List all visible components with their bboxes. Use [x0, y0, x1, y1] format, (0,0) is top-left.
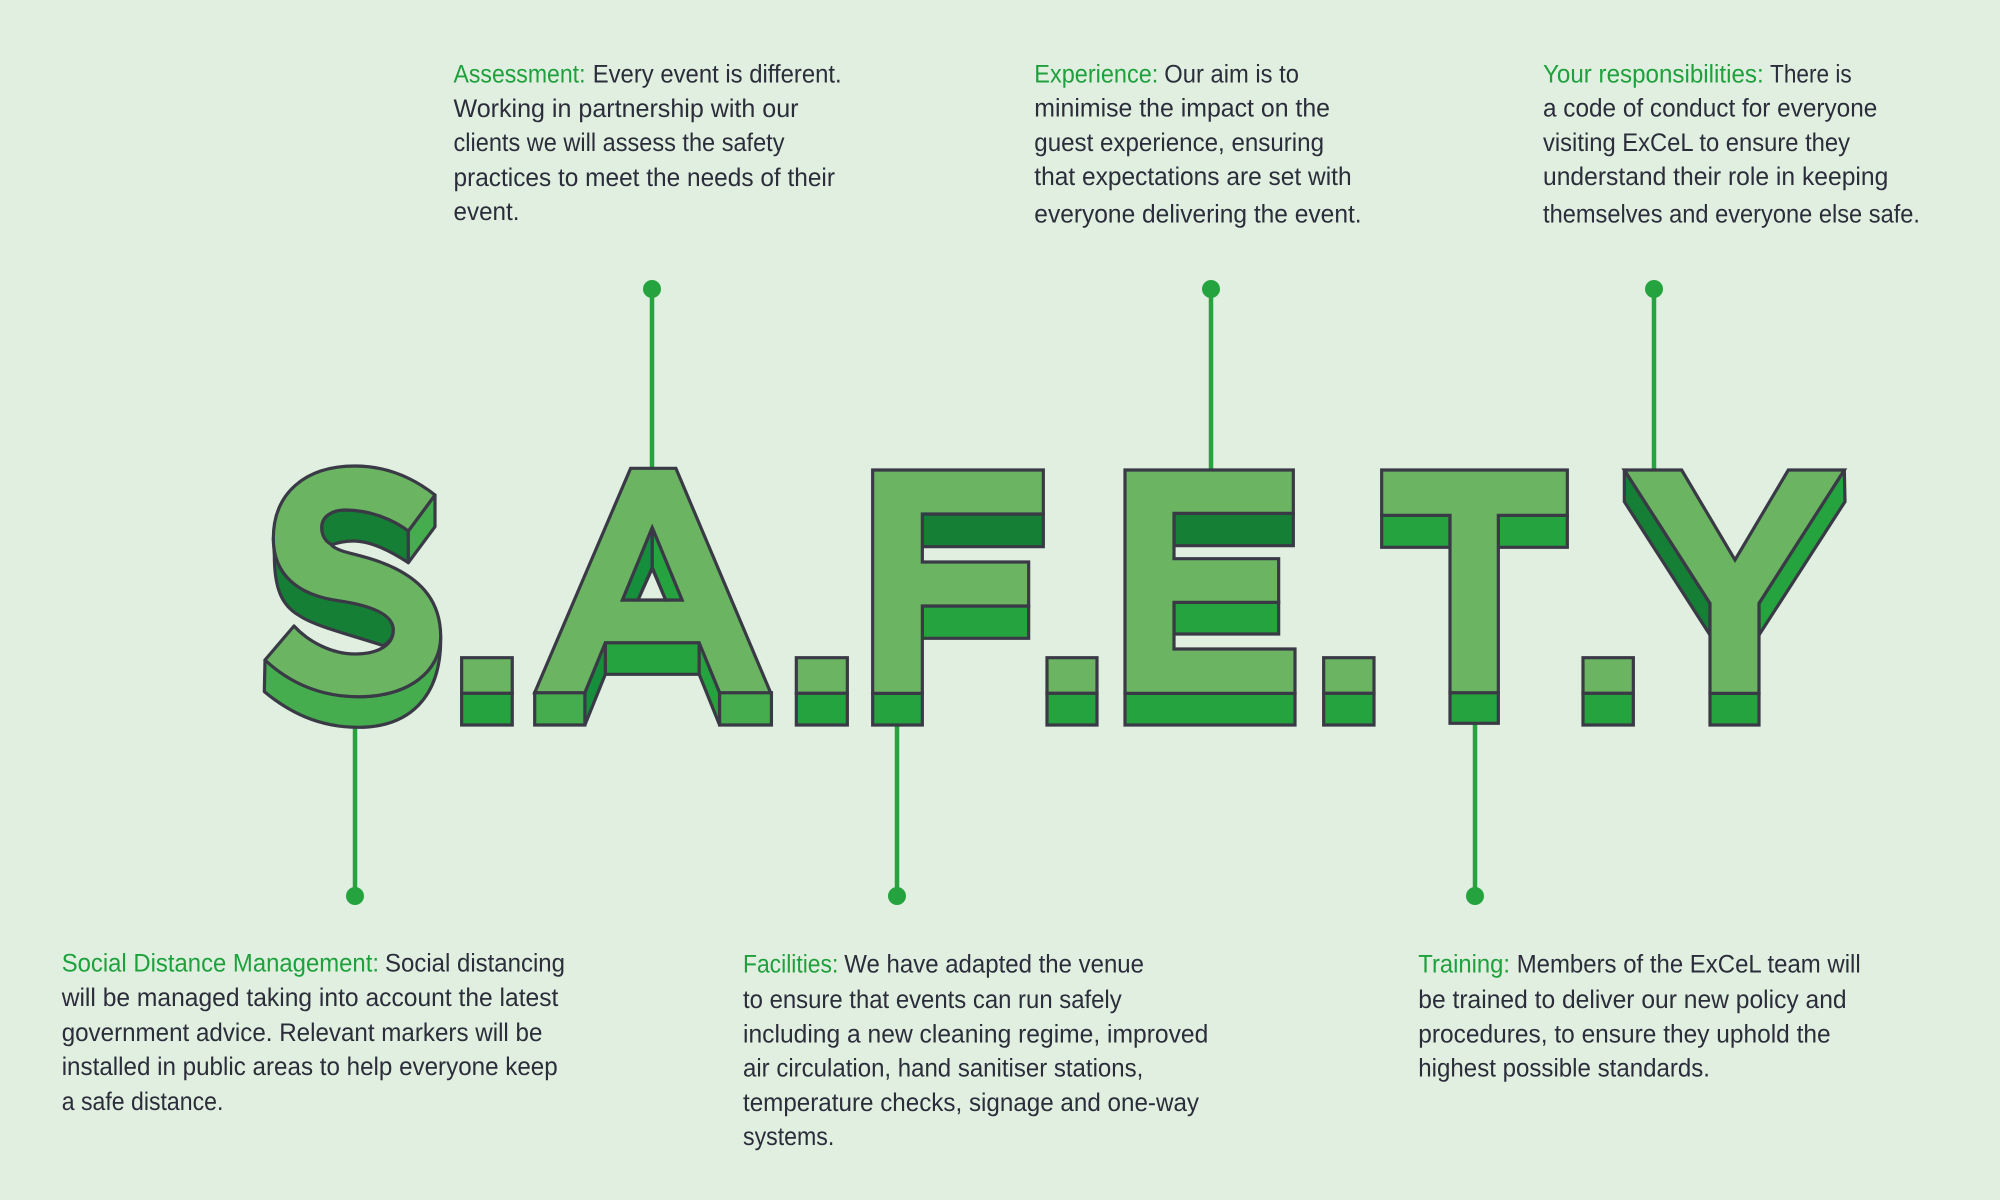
text block: assessment: Working in partnership with our [454, 95, 799, 123]
letter E [1125, 470, 1295, 725]
text block: facilities [743, 951, 1208, 1151]
letter T [1382, 470, 1567, 723]
text block: assessment: Every event is different. [593, 60, 842, 88]
period after A [796, 658, 847, 725]
text block: your responsibilities: visiting ExCeL to ensure they [1543, 129, 1850, 157]
connector: assessment [643, 280, 661, 472]
text block: assessment: practices to meet the needs of their [454, 164, 835, 192]
text block: experience: everyone delivering the event. [1034, 200, 1362, 228]
text block: your responsibilities: a code of conduct for everyone [1543, 95, 1877, 123]
letter A [535, 468, 771, 725]
text block: training [1418, 951, 1861, 1083]
text block: facilities: We have adapted the venue [844, 951, 1144, 979]
heading: training: Training: [1418, 951, 1510, 979]
text block: your responsibilities [1543, 60, 1920, 228]
period after E [1324, 658, 1374, 725]
letter Y [1624, 470, 1845, 725]
heading: facilities: Facilities: [743, 951, 838, 979]
text block: experience: Our aim is to [1164, 60, 1299, 88]
text block: your responsibilities: themselves and everyone else safe. [1543, 200, 1920, 228]
heading: social distance management: Social Distance Management: [62, 950, 379, 978]
connector: your responsibilities [1645, 280, 1663, 472]
text block: experience [1034, 60, 1362, 228]
letter S [264, 466, 441, 727]
text block: training: procedures, to ensure they uphold the [1418, 1020, 1831, 1048]
text block: assessment: clients we will assess the safety [454, 129, 785, 157]
period after S [462, 658, 512, 725]
text block: experience: that expectations are set with [1034, 163, 1352, 191]
text block: assessment [454, 60, 842, 226]
text block: training: Members of the ExCeL team will [1517, 951, 1861, 979]
letter F [873, 470, 1043, 725]
text block: facilities: to ensure that events can run safely [743, 986, 1122, 1014]
text block: facilities: including a new cleaning regime, improved [743, 1020, 1208, 1048]
text block: experience: minimise the impact on the [1034, 95, 1330, 123]
text block: facilities: systems. [743, 1123, 834, 1151]
connector: facilities [888, 724, 906, 905]
text block: social distance management [61, 950, 565, 1116]
text block: training: highest possible standards. [1418, 1055, 1710, 1083]
text block: assessment: event. [454, 198, 520, 226]
text block: facilities: temperature checks, signage and one-way [743, 1089, 1199, 1117]
connector: training [1466, 724, 1484, 905]
text block: social distance management: Social distancing [385, 950, 565, 978]
text block: your responsibilities: There is [1770, 60, 1852, 88]
connector: social distance management [346, 724, 364, 905]
text block: social distance management: a safe distance. [62, 1088, 223, 1116]
connector: experience [1202, 280, 1220, 472]
text block: your responsibilities: understand their role in keeping [1543, 163, 1888, 191]
heading: your responsibilities: Your responsibilities: [1543, 60, 1764, 88]
text block: social distance management: government advice. Relevant markers will be [62, 1019, 542, 1047]
text block: training: be trained to deliver our new policy and [1418, 986, 1847, 1014]
text block: social distance management: will be managed taking into account the latest [61, 984, 558, 1012]
text block: facilities: air circulation, hand sanitiser stations, [743, 1055, 1143, 1083]
heading: assessment: Assessment: [454, 60, 586, 88]
text block: experience: guest experience, ensuring [1034, 129, 1324, 157]
period after T [1583, 658, 1633, 725]
text block: social distance management: installed in public areas to help everyone keep [62, 1053, 558, 1081]
heading: experience: Experience: [1034, 60, 1158, 88]
period after F [1047, 658, 1097, 725]
